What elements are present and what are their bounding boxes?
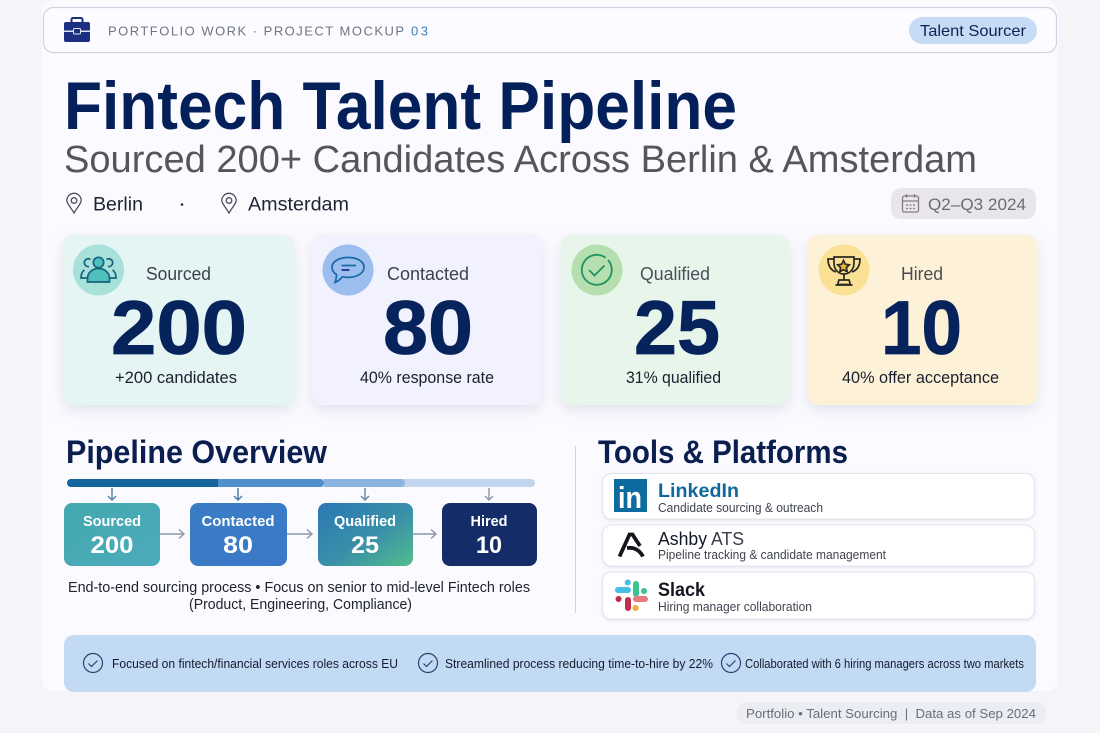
stage: Contacted: Contacted (202, 513, 274, 530)
panel: Contacted card (312, 235, 542, 405)
icon: pin Berlin (67, 193, 81, 213)
panel: Qualified card: Qualified (640, 264, 710, 284)
panel: Hired card (808, 235, 1037, 405)
metric: 10: 10 (881, 286, 962, 371)
stage: Sourced (64, 503, 160, 566)
subtitle: Sourced 200+ Candidates Across Berlin & Amsterdam (64, 139, 977, 181)
date badge: Q2–Q3 2024 (928, 195, 1026, 214)
arrows: bar to stages (108, 488, 493, 500)
panel: Hired card: 40% offer acceptance (842, 369, 999, 387)
panel: Qualified card: 31% qualified (626, 369, 721, 387)
pipeline caption: End-to-end sourcing process • Focus on senior to mid-level Fintech roles (68, 580, 530, 596)
icon: check circle (572, 244, 622, 296)
progress bar (67, 479, 535, 487)
icon: pin Amsterdam (222, 193, 236, 213)
header label: 03 (411, 24, 430, 38)
pipeline caption (68, 580, 530, 613)
panel: Contacted card: Contacted (387, 264, 469, 284)
heading: Pipeline Overview: Pipeline Overview (66, 434, 327, 470)
role badge: Talent Sourcer (920, 23, 1027, 40)
locations (67, 193, 349, 216)
icon: briefcase (64, 18, 90, 42)
stage: Hired: Hired (470, 513, 508, 530)
footer badge: Portfolio • Talent Sourcing | Data as of Sep 2024 (746, 706, 1036, 721)
panel: Hired card: Hired (901, 264, 943, 284)
tool: Slack (602, 572, 1034, 619)
highlight: fintech focus: Focused on fintech/financial services roles across EU (112, 656, 398, 671)
header label: PORTFOLIO WORK · PROJECT MOCKUP (108, 24, 404, 38)
highlight: hiring managers (722, 654, 1024, 672)
highlights band (64, 635, 1036, 692)
metric: 25: 25 (634, 286, 720, 371)
highlight: time to hire (418, 654, 713, 672)
icon: chat bubble (322, 244, 374, 296)
stage: Qualified: 25 (351, 532, 379, 559)
highlight: hiring managers: Collaborated with 6 hiring managers across two markets (745, 656, 1024, 671)
icon: people (73, 244, 124, 296)
header bar (44, 8, 1056, 52)
icon: calendar (902, 194, 918, 212)
highlight: fintech focus (84, 654, 398, 672)
title: Fintech Talent Pipeline (64, 68, 737, 144)
footer badge (737, 702, 1046, 724)
panel: Qualified card (561, 235, 789, 405)
heading: Tools & Platforms: Tools & Platforms (598, 434, 848, 470)
location: Amsterdam: Amsterdam (248, 194, 349, 216)
arrow (287, 530, 312, 538)
stage: Qualified: Qualified (334, 513, 396, 530)
stage: Contacted (190, 503, 287, 566)
stage: Hired (442, 503, 537, 566)
stage: Qualified (318, 503, 413, 566)
icon: Ashby logo (620, 534, 643, 556)
panel: Sourced card (63, 235, 294, 405)
metric: 200: 200 (111, 286, 247, 371)
stage: Contacted: 80 (223, 532, 253, 559)
icon: Slack logo (618, 582, 645, 608)
icon: trophy (818, 244, 870, 296)
location: Berlin: Berlin (93, 194, 143, 216)
role badge (909, 17, 1037, 44)
tool: LinkedIn: LinkedIn (658, 481, 739, 502)
arrow (160, 530, 184, 538)
pipeline caption: (Product, Engineering, Compliance) (189, 597, 412, 613)
tool: LinkedIn (602, 474, 1034, 519)
highlight: time to hire: Streamlined process reducing time-to-hire by 22% (445, 656, 713, 671)
tool: Slack: Slack (658, 580, 705, 601)
stage: Sourced: 200 (90, 532, 134, 559)
stage: Hired: 10 (476, 532, 502, 559)
tool: Ashby ATS (602, 525, 1034, 566)
panel: Sourced card: +200 candidates (115, 369, 237, 387)
panel: Contacted card: 40% response rate (360, 369, 494, 387)
date badge (891, 188, 1036, 219)
icon: LinkedIn logo: in (618, 480, 642, 515)
tool: Ashby ATS: Pipeline tracking & candidate management (658, 548, 886, 562)
arrow (413, 530, 436, 538)
stage: Sourced: Sourced (83, 513, 141, 530)
tool: LinkedIn: Candidate sourcing & outreach (658, 501, 823, 515)
tool: Ashby ATS: Ashby ATS (658, 529, 744, 549)
panel: Sourced card: Sourced (146, 264, 211, 284)
tool: Slack: Hiring manager collaboration (658, 600, 812, 614)
metric: 80: 80 (383, 286, 473, 371)
